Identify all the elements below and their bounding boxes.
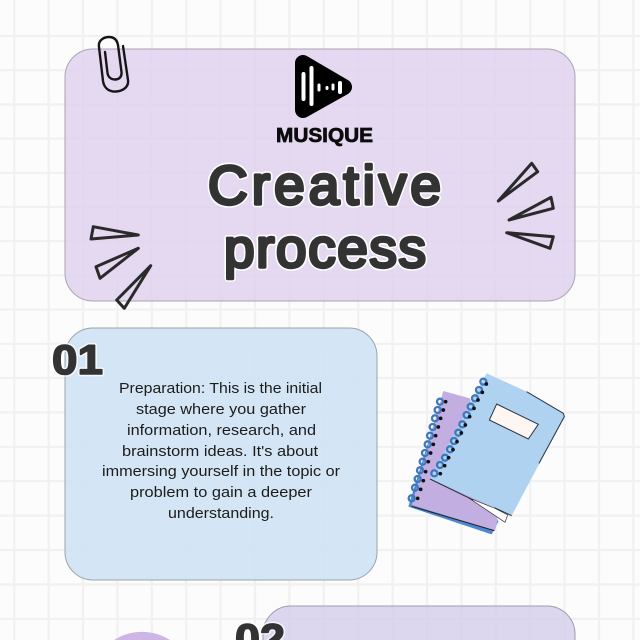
decoration: left burst triangles [91, 227, 151, 308]
icon: spiral notebooks [408, 373, 564, 534]
panel: step 01 [65, 328, 377, 580]
text block: step 01 description: immersing yourself in the topic or [102, 464, 340, 480]
title [208, 154, 441, 279]
text block: step 01 description: information, research, and [127, 423, 316, 439]
step number 01: 01 [52, 336, 103, 383]
title: Creative [208, 154, 441, 216]
text block: step 01 description: stage where you gather [136, 402, 306, 418]
panel: header [65, 49, 575, 301]
text block: step 01 description: Preparation: This is the initial [119, 381, 322, 397]
icon: purple circle [114, 632, 170, 640]
text block: step 01 description [102, 381, 340, 522]
text block: step 01 description: understanding. [168, 506, 274, 522]
title: Creative [208, 154, 441, 216]
logo wordmark: MUSIQUE [276, 125, 373, 147]
text block: step 01 description: brainstorm ideas. It's about [122, 444, 318, 460]
decoration: right burst triangles [498, 163, 553, 248]
step number 01: 01 [52, 336, 103, 383]
title: process [224, 217, 426, 279]
panel: step 02 [263, 606, 575, 640]
logo: play triangle with sound wave [303, 63, 344, 110]
text block: step 01 description: problem to gain a deeper [130, 485, 312, 501]
title: process [224, 217, 426, 279]
icon: paperclip [99, 37, 128, 92]
